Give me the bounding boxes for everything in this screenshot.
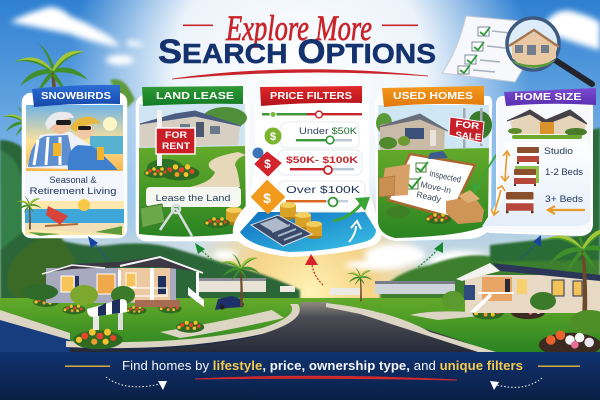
- boxes: [379, 164, 484, 224]
- checklist text: move-in ready: [416, 179, 452, 204]
- tag: green dollar: [252, 128, 282, 158]
- lawns: [0, 298, 600, 352]
- tag: green dollar: $: [270, 131, 276, 143]
- header: price filters: [260, 86, 362, 106]
- flowers: [204, 217, 230, 228]
- panel: snowbirds: [16, 85, 126, 237]
- header: snowbirds: SNOWBIRDS: [41, 91, 111, 102]
- palm: right foreground: [544, 222, 600, 318]
- panel: used homes: [376, 86, 492, 240]
- house: right foreground: [442, 263, 600, 313]
- sign: for sale: [449, 108, 484, 148]
- filter: 50k to 100k: $50K- $100K: [286, 155, 358, 166]
- tag: orange dollar: [252, 181, 284, 213]
- checklist: [442, 16, 530, 82]
- road: [0, 302, 492, 352]
- car: [215, 296, 244, 310]
- title script: Explore More: [225, 8, 372, 48]
- icon: medium bed: [514, 166, 539, 186]
- icon: studio bed: [517, 147, 539, 164]
- checklist text: move-in ready: Move-In: [420, 179, 452, 195]
- coins: [280, 202, 322, 239]
- distant trees and side foliage: [0, 79, 600, 310]
- clouds: [10, 7, 600, 270]
- arrow: white up: [349, 221, 361, 242]
- sign: for rent: [156, 110, 195, 166]
- header: land lease: [142, 86, 243, 106]
- filter: under 50k: [281, 122, 359, 148]
- lower beach scene: [16, 196, 124, 236]
- title main: SEARCH OPTIONS: [158, 33, 436, 71]
- palm: upper left: [14, 44, 88, 140]
- caption: Retirement Living: [30, 186, 116, 196]
- beach scene with couple: [26, 105, 123, 171]
- filter: over 100k: Over $100K: [286, 185, 361, 196]
- dotted arrow left: [106, 377, 167, 390]
- arrow: green curve: [472, 142, 507, 194]
- sign: for sale: SALE: [455, 130, 482, 142]
- header: snowbirds: [32, 85, 120, 107]
- yard scene: [376, 105, 492, 238]
- shrub: right: [570, 310, 600, 334]
- plant: [386, 206, 410, 218]
- sidewalks and curbs: [0, 303, 570, 352]
- palm: horizon far: [347, 268, 373, 302]
- keys: [160, 205, 192, 236]
- title swoosh: [172, 70, 428, 79]
- title accent lines: [183, 24, 418, 26]
- filter: 50k to 100k: [278, 150, 362, 175]
- palm: horizon: [219, 254, 260, 306]
- arrow: green right: [418, 242, 443, 267]
- plant: [425, 213, 451, 224]
- panel: land lease: [137, 86, 248, 240]
- header: used homes: USED HOMES: [393, 91, 473, 102]
- coins: [226, 207, 242, 225]
- clipboard: [388, 151, 475, 217]
- house: left foreground: [22, 256, 204, 307]
- label: 3+ beds: 3+ Beds: [545, 194, 583, 204]
- lease the land label: [146, 187, 241, 207]
- bed sizes panel: [482, 141, 590, 226]
- arrow: blue right: [520, 235, 541, 258]
- tag: orange dollar: $: [263, 190, 271, 206]
- size arrows: [491, 151, 510, 215]
- header: home size: [504, 88, 596, 106]
- tag: red dollar: [255, 152, 281, 176]
- sign: for rent: FOR: [165, 130, 188, 140]
- arrow: green left: [195, 243, 220, 266]
- flower beds: [33, 296, 600, 357]
- header: used homes: [382, 86, 484, 107]
- icon: large bed: [506, 192, 534, 213]
- distant homes: [198, 278, 455, 295]
- money stack: [140, 204, 165, 228]
- calculator: [251, 215, 312, 246]
- mailbox: [87, 299, 127, 330]
- arrow: orange: [548, 206, 585, 214]
- magnifying glass: [507, 18, 592, 84]
- caption: Seasonal &: [50, 175, 96, 185]
- arrow: blue left: [88, 236, 108, 260]
- label: studio: Studio: [544, 146, 573, 156]
- dotted arrow right: [490, 378, 542, 390]
- panel: price filters: [234, 86, 380, 256]
- arrow: green: [333, 197, 370, 221]
- checklist and magnifier: [442, 16, 592, 84]
- range slider: [262, 111, 362, 118]
- checklist text: inspected: Inspected: [429, 168, 462, 185]
- lease the land label: Lease the Land: [156, 193, 230, 204]
- bottom band: [0, 352, 600, 400]
- blue base: [240, 212, 376, 252]
- house illustration: [507, 110, 587, 139]
- palm: mid left: [2, 106, 47, 164]
- filter: under 50k: Under $50K: [299, 126, 358, 137]
- sign: for sale: FOR: [455, 119, 480, 131]
- header: price filters: PRICE FILTERS: [270, 91, 353, 102]
- footer underline: [195, 376, 457, 380]
- header: home size: HOME SIZE: [514, 92, 582, 103]
- tag: red dollar: $: [264, 157, 271, 171]
- sign: for rent: RENT: [162, 141, 190, 152]
- panel: home size: [482, 88, 596, 235]
- arrow: red centre: [305, 254, 323, 285]
- caption: [30, 175, 116, 196]
- label: 1-2 beds: 1-2 Beds: [545, 167, 583, 177]
- header: land lease: LAND LEASE: [156, 90, 234, 102]
- checklist text: move-in ready: Ready: [416, 189, 443, 204]
- filter: over 100k: [278, 181, 365, 212]
- lease scene: [139, 104, 247, 237]
- caption band: [25, 171, 124, 203]
- footer text: Find homes by lifestyle, price, ownership type, and unique filters: [122, 358, 523, 373]
